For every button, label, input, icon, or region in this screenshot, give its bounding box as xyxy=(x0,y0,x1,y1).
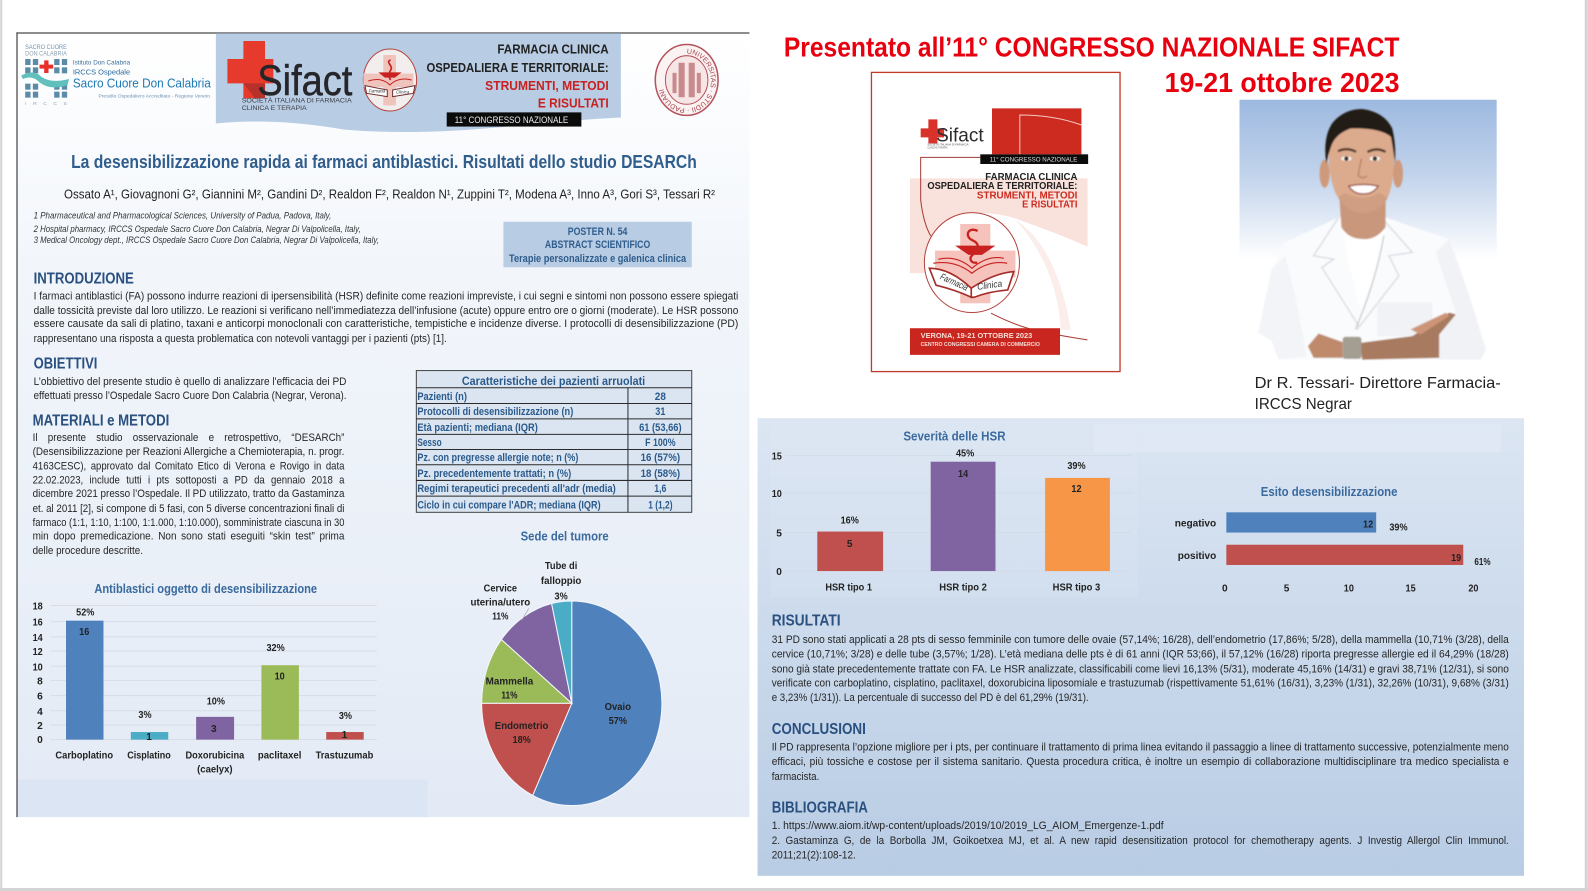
bar chart: Severità delle HSR: 16% xyxy=(841,515,859,526)
logo: Sacro Cuore Don Calabria: Istituto Don Calabria xyxy=(73,60,131,66)
bar chart: Antiblastici: 32% xyxy=(266,643,285,654)
heading: congress theme: OSPEDALIERA E TERRITORIALE: xyxy=(426,60,609,75)
heading: congress announcement: 19-21 ottobre 2023 xyxy=(1165,67,1399,98)
bar chart: Antiblastici: Cisplatino xyxy=(127,750,171,761)
icon: Farmacia Clinica emblem: Farmacia xyxy=(369,88,386,93)
table: patient characteristics: Ciclo in cui compare l'ADR; mediana (IQR) xyxy=(417,499,601,511)
callout: poster number: ABSTRACT SCIENTIFICO xyxy=(545,239,650,251)
table: patient characteristics: 1,6 xyxy=(654,483,666,495)
section: Risultati: 31 PD sono stati applicati a 28 pts di sesso femminile con tumore delle ovaie (57,14%; 16/28), dell’endometrio (17,86%; 5/28), della mammella (10,71% (3/28), della xyxy=(772,634,1509,646)
title: La desensibilizzazione rapida ai farmaci antiblastici. Risultati dello studio DESARCh xyxy=(71,151,697,172)
logo: Sacro Cuore Don Calabria: IRCCS Ospedale xyxy=(73,68,130,77)
bar chart: Esito desensibilizzazione: 10 xyxy=(1344,583,1354,594)
section: Introduzione: dalle tossicità previste dal loro utilizzo. Le reazioni si verificano nell’immediatezza dell’infusione (acute) oppure entro ore o giorni (moderate). Le HSR possono xyxy=(34,305,738,317)
section: Obiettivi: L’obbiettivo del presente studio è quello di analizzare l'efficacia dei PD xyxy=(34,376,347,388)
table: patient characteristics: 1 (1,2) xyxy=(648,499,673,511)
section: Introduzione: essere causate da sali di platino, taxani e anticorpi monoclonali con caratteristiche, tempistiche e incidenze diverse. I protocolli di desensibilizzazione (PD) xyxy=(34,318,738,330)
caption: portrait: IRCCS Negrar xyxy=(1255,396,1352,413)
section: Risultati: e 3,23% (1/31)). La percentuale di successo del PD è del 61,29% (19/31). xyxy=(772,692,1089,704)
bar chart: Severità delle HSR: 5 xyxy=(847,539,853,550)
bar chart: Antiblastici: paclitaxel xyxy=(258,750,302,761)
affiliations: 1 Pharmaceutical and Pharmacological Sciences, University of Padua, Padova, Italy, xyxy=(34,211,331,221)
bar chart: Antiblastici: Antiblastici oggetto di desensibilizzazione xyxy=(94,581,317,596)
caption: portrait: Dr R. Tessari- Direttore Farmacia- xyxy=(1255,375,1501,392)
section: Conclusioni: efficaci, più tossiche e costose per il sistema sanitario. Questa procedura critica, è inoltre un esempio di collaborazione multidisciplinare tra medico specialista e xyxy=(772,756,1509,768)
bar chart: Severità delle HSR: 15 xyxy=(772,452,782,463)
icon: Sifact logo small: SOCIETÀ ITALIANA DI FARMACIA xyxy=(927,142,969,146)
icon: Farmacia Clinica emblem large xyxy=(924,213,1019,313)
logo: Sacro Cuore Don Calabria: DON CALABRIA xyxy=(25,51,68,58)
panel: results xyxy=(758,418,1524,876)
pie chart: Sede del tumore: Mammella xyxy=(486,676,534,687)
bar chart: Antiblastici: 52% xyxy=(76,608,94,619)
authors: Ossato A¹, Giovagnoni G², Giannini M², Gandini D², Realdon F², Realdon N¹, Zuppini T², Modena A³, Inno A³, Gori S³, Tessari R² xyxy=(64,186,716,201)
bar chart: Antiblastici: Trastuzumab xyxy=(316,750,373,761)
pie chart: Sede del tumore: 11% xyxy=(501,691,518,702)
badge: 11° congresso nazionale xyxy=(447,112,581,127)
section: Conclusioni: Il PD rappresenta l’opzione migliore per i pts, per continuare il trattamento di prima linea evitando il passaggio a linee di trattamento successive, potenzialmente meno xyxy=(772,741,1509,753)
bar chart: Severità delle HSR: HSR tipo 2 xyxy=(939,582,987,593)
table: patient characteristics: Protocolli di desensibilizzazione (n) xyxy=(417,406,574,418)
pie chart: Sede del tumore xyxy=(471,529,662,806)
bar chart: Antiblastici: 12 xyxy=(33,647,43,658)
bar chart: Esito desensibilizzazione: 0 xyxy=(1222,583,1228,594)
heading: poster theme: OSPEDALIERA E TERRITORIALE: xyxy=(927,181,1077,192)
section: Conclusioni xyxy=(772,721,1509,783)
section: Risultati xyxy=(772,613,1509,704)
section: Materiali e metodi: 4163CESC), approvato dal Comitato Etico di Verona e Rovigo in data xyxy=(33,460,345,472)
table: patient characteristics: 28 xyxy=(655,391,666,403)
logo: Sacro Cuore Don Calabria: SACRO CUORE xyxy=(25,44,67,51)
bar chart: Severità delle HSR: 5 xyxy=(776,529,782,540)
heading: congress theme: FARMACIA CLINICA xyxy=(497,42,609,57)
bar chart: Esito desensibilizzazione: 39% xyxy=(1389,523,1408,534)
bar chart: Esito desensibilizzazione: 20 xyxy=(1468,583,1479,594)
bar chart: Antiblastici: 10 xyxy=(275,671,285,682)
caption: portrait xyxy=(1255,375,1501,413)
bar chart: Antiblastici: 8 xyxy=(37,676,43,687)
section: Obiettivi xyxy=(34,356,347,402)
bar chart: Antiblastici: 16 xyxy=(79,627,90,638)
bar chart: Antiblastici: 10% xyxy=(207,697,225,708)
section: Bibliografia: 2. Gastaminza G, de la Borbolla JM, Goikoetxea MJ, et al. A new rapid desensitization protocol for chemotherapy agents. J Investig Allergol Clin Immunol. xyxy=(772,835,1509,847)
bar chart: Severità delle HSR: Severità delle HSR xyxy=(903,428,1006,443)
heading: poster theme: STRUMENTI, METODI xyxy=(977,190,1078,201)
bar chart: Severità delle HSR: HSR tipo 1 xyxy=(825,582,872,593)
badge: poster congress: 11° CONGRESSO NAZIONALE xyxy=(990,155,1078,163)
logo: Sacro Cuore Don Calabria: Sacro Cuore Don Calabria xyxy=(73,77,212,91)
table: patient characteristics: F 100% xyxy=(645,437,676,449)
logo: University of Padua seal: UNIVERSITAS · STUDII · PADUANI xyxy=(658,48,716,113)
pie chart: Sede del tumore: 3% xyxy=(555,591,568,602)
table: patient characteristics: 31 xyxy=(655,406,665,418)
section: Introduzione: rappresentano una risposta a questa problematica con notevoli vantaggi per i pazienti (pts) [1]. xyxy=(34,333,447,345)
section: Materiali e metodi: delle procedure descritte. xyxy=(33,545,143,557)
logo: Sifact xyxy=(227,41,352,112)
bar chart: Antiblastici: 3% xyxy=(138,710,152,721)
pie chart: Sede del tumore: Sede del tumore xyxy=(521,529,609,544)
section: Materiali e metodi: dicembre 2021 presso l’Ospedale. Il PD utilizzato, tratto da Gastaminza xyxy=(33,488,345,500)
section: Risultati: sono già state precedentemente trattate con FA. Le HSR analizzate, classificabili come lievi 16,13% (5/31), moderate 45,16% (14/31) e gravi 38,71% (12/31), si sono xyxy=(772,663,1509,675)
banner: Verona dates: CENTRO CONGRESSI CAMERA DI COMMERCIO xyxy=(921,342,1040,348)
pie chart: Sede del tumore: Cervice xyxy=(484,583,517,594)
section: Bibliografia: BIBLIOGRAFIA xyxy=(772,800,868,817)
bar chart: Esito desensibilizzazione: negativo xyxy=(1175,518,1216,529)
bar chart: Severità delle HSR: 12 xyxy=(1071,484,1082,495)
heading: poster theme: FARMACIA CLINICA xyxy=(985,172,1077,183)
heading: poster theme: E RISULTATI xyxy=(1022,200,1078,211)
logo: Sacro Cuore Don Calabria: Presidio Ospedaliero Accreditato - Regione Veneto xyxy=(98,93,211,98)
pie chart: Sede del tumore: Endometrio xyxy=(495,721,548,732)
section: Bibliografia: 2011;21(2):108-12. xyxy=(772,850,856,862)
portrait: Dr R. Tessari xyxy=(1240,100,1497,360)
section: Materiali e metodi: Il presente studio osservazionale e retrospettivo, “DESARCh” xyxy=(33,432,345,444)
section: Risultati: RISULTATI xyxy=(772,613,841,630)
table: patient characteristics: Età pazienti; mediana (IQR) xyxy=(417,422,538,434)
section: Conclusioni: farmacista. xyxy=(772,771,819,783)
banner: Verona dates xyxy=(910,328,1060,355)
section: Materiali e metodi xyxy=(33,412,345,557)
affiliations xyxy=(33,211,379,245)
heading: congress announcement: Presentato all’11° CONGRESSO NAZIONALE SIFACT xyxy=(784,32,1400,63)
bar chart: Antiblastici: Carboplatino xyxy=(55,750,113,761)
table: patient characteristics: Pz. precedentemente trattati; n (%) xyxy=(417,468,572,480)
pie chart: Sede del tumore: 11% xyxy=(492,612,508,623)
heading: congress announcement xyxy=(784,32,1400,98)
logo: Sifact: Sifact xyxy=(257,57,352,105)
section: Introduzione: I farmaci antiblastici (FA) possono indurre reazioni di ipersensibilità (HSR) definite come reazioni impreviste, i cui segni e sintomi non possono essere spiegati xyxy=(34,291,738,303)
bar chart: Esito desensibilizzazione xyxy=(1175,484,1491,594)
section: Materiali e metodi: (Desensibilizzazione per Reazioni Allergiche a Chemioterapia, n. progr. xyxy=(33,446,344,458)
heading: congress theme xyxy=(426,42,609,110)
icon: Farmacia Clinica emblem large: Farmacia xyxy=(939,272,970,293)
badge: 11° congresso nazionale: 11° CONGRESSO NAZIONALE xyxy=(455,115,568,125)
table: patient characteristics: Sesso xyxy=(417,437,442,449)
table: patient characteristics xyxy=(416,371,692,512)
table: patient characteristics: 18 (58%) xyxy=(641,468,681,480)
bar chart: Antiblastici: 4 xyxy=(37,707,43,718)
bar chart: Esito desensibilizzazione: 15 xyxy=(1406,583,1416,594)
section: Bibliografia xyxy=(772,800,1509,862)
bar chart: Antiblastici: 6 xyxy=(37,692,43,703)
section: Materiali e metodi: 22.02.2023, include tutti i pts sottoposti a PD da gennaio 2018 a xyxy=(33,474,345,486)
bar chart: Severità delle HSR: 14 xyxy=(958,469,968,480)
table: patient characteristics: 16 (57%) xyxy=(641,452,681,464)
banner: Verona dates: VERONA, 19-21 OTTOBRE 2023 xyxy=(921,331,1032,340)
header band: Sifact xyxy=(216,33,621,132)
logo: Sacro Cuore Don Calabria xyxy=(21,44,212,107)
logo: Sifact: CLINICA E TERAPIA xyxy=(242,105,307,112)
table: patient characteristics: Pazienti (n) xyxy=(417,391,467,403)
pie chart: Sede del tumore: falloppio xyxy=(541,576,581,587)
section: Materiali e metodi: farmaco (1:1, 1:10, 1:100, 1:1.000, 1:10.000), somministrate ciascuna in 30 xyxy=(33,517,345,529)
logo: Sacro Cuore Don Calabria: I R C C S xyxy=(25,101,68,107)
pie chart: Sede del tumore: Tube di xyxy=(545,561,577,572)
panel: left poster xyxy=(16,32,750,818)
bar chart: Esito desensibilizzazione: 12 xyxy=(1363,520,1373,531)
table: patient characteristics: Regimi terapeutici precedenti all'adr (media) xyxy=(417,483,616,495)
pie chart: Sede del tumore: 57% xyxy=(609,716,627,727)
bar chart: Severità delle HSR xyxy=(772,428,1132,593)
bar chart: Esito desensibilizzazione: 5 xyxy=(1284,583,1290,594)
affiliations: 3 Medical Oncology dept., IRCCS Ospedale Sacro Cuore Don Calabria, Negrar Di Valpolicella, Italy, xyxy=(34,235,379,245)
heading: congress theme: STRUMENTI, METODI xyxy=(485,78,609,93)
heading: congress theme: E RISULTATI xyxy=(538,95,609,110)
bar chart: Severità delle HSR: 0 xyxy=(776,567,782,578)
bar chart: Antiblastici: 18 xyxy=(33,602,43,613)
table: patient characteristics: Pz. con pregresse allergie note; n (%) xyxy=(417,452,579,464)
section: Materiali e metodi: min dopo premedicazione. Non sono stati eseguiti “skin test” prima xyxy=(33,531,345,543)
icon: Sifact logo small: Sifact xyxy=(936,125,984,147)
bar chart: Antiblastici: 10 xyxy=(33,662,43,673)
bar chart: Antiblastici: (caelyx) xyxy=(197,765,233,776)
badge: poster congress xyxy=(980,154,1088,164)
bar chart: Antiblastici: 2 xyxy=(37,721,43,732)
icon: Sifact logo small xyxy=(921,119,984,150)
panel: congress poster image xyxy=(871,72,1120,372)
bar chart: Severità delle HSR: 45% xyxy=(956,449,974,460)
callout: poster number: Terapie personalizzate e galenica clinica xyxy=(509,253,686,265)
pie chart: Sede del tumore: Ovaio xyxy=(605,702,631,713)
affiliations: 2 Hospital pharmacy, IRCCS Ospedale Sacro Cuore Don Calabria, Negrar Di Valpolicella, Italy, xyxy=(33,224,361,234)
pie chart: Sede del tumore: 18% xyxy=(513,735,531,746)
bar chart: Antiblastici: 3 xyxy=(211,724,217,735)
bar chart: Antiblastici: 1 xyxy=(342,730,348,741)
bar chart: Esito desensibilizzazione: 19 xyxy=(1451,553,1462,564)
bar chart: Antiblastici: 3% xyxy=(339,711,352,722)
section: Risultati: verificate con carboplatino, cisplatino, paclitaxel, doxorubicina liposomiale e trastuzumab (rispettivamente 51,61% (16/31), 3,23% (1/31), 32,26% (10/31), 9,68% (3/31) xyxy=(772,677,1509,689)
table: patient characteristics: Caratteristiche dei pazienti arruolati xyxy=(462,374,645,388)
bar chart: Severità delle HSR: 10 xyxy=(772,489,782,500)
callout: poster number xyxy=(503,222,692,267)
icon: Farmacia Clinica emblem: Clinica xyxy=(396,90,410,95)
bar chart: Esito desensibilizzazione: Esito desensibilizzazione xyxy=(1261,484,1397,499)
bar chart: Antiblastici: Doxorubicina xyxy=(185,750,245,761)
icon: Farmacia Clinica emblem large: Clinica xyxy=(976,279,1003,292)
icon: Farmacia Clinica emblem xyxy=(363,49,417,111)
section: Materiali e metodi: et. al 2011 [2], si compone di 5 fasi, con 5 diverse concentrazioni finali di xyxy=(33,503,344,515)
bar chart: Severità delle HSR: HSR tipo 3 xyxy=(1053,582,1101,593)
bar chart: Severità delle HSR: 39% xyxy=(1067,461,1086,472)
logo: Sifact: SOCIETÀ ITALIANA DI FARMACIA xyxy=(242,95,352,104)
pie chart: Sede del tumore: uterina/utero xyxy=(471,597,530,608)
callout: poster number: POSTER N. 54 xyxy=(568,226,628,238)
section: Introduzione: INTRODUZIONE xyxy=(34,270,134,287)
bar chart: Antiblastici: 14 xyxy=(33,633,43,644)
section: Bibliografia: 1. https://www.aiom.it/wp-content/uploads/2019/10/2019_LG_AIOM_Emergenze-1.pdf xyxy=(772,820,1164,832)
bar chart: Antiblastici: 0 xyxy=(37,735,43,746)
bar chart: Esito desensibilizzazione: 61% xyxy=(1474,557,1491,568)
section: Conclusioni: CONCLUSIONI xyxy=(772,721,866,738)
bar chart: Antiblastici: 1 xyxy=(146,732,152,743)
bar chart: Antiblastici xyxy=(33,581,377,776)
section: Introduzione xyxy=(34,270,738,345)
heading: poster theme xyxy=(927,172,1078,211)
bar chart: Esito desensibilizzazione: positivo xyxy=(1178,551,1216,562)
section: Obiettivi: effettuati presso l’Ospedale Sacro Cuore Don Calabria (Negrar, Verona). xyxy=(34,390,346,402)
section: Obiettivi: OBIETTIVI xyxy=(34,356,97,373)
table: patient characteristics: 61 (53,66) xyxy=(639,422,682,434)
icon: Sifact logo small: CLINICA E TERAPIA xyxy=(927,146,947,150)
bar chart: Antiblastici: 16 xyxy=(33,618,43,629)
section: Materiali e metodi: MATERIALI e METODI xyxy=(33,412,169,429)
section: Risultati: cervice (10,71%; 3/28) e delle tube (3,57%; 1/28). L’età mediana delle pts è di 61 anni (IQR 53;66), il 57,12% (16/28) riporta pregresse allergie ed il 64,29% (18/28) xyxy=(772,649,1509,661)
